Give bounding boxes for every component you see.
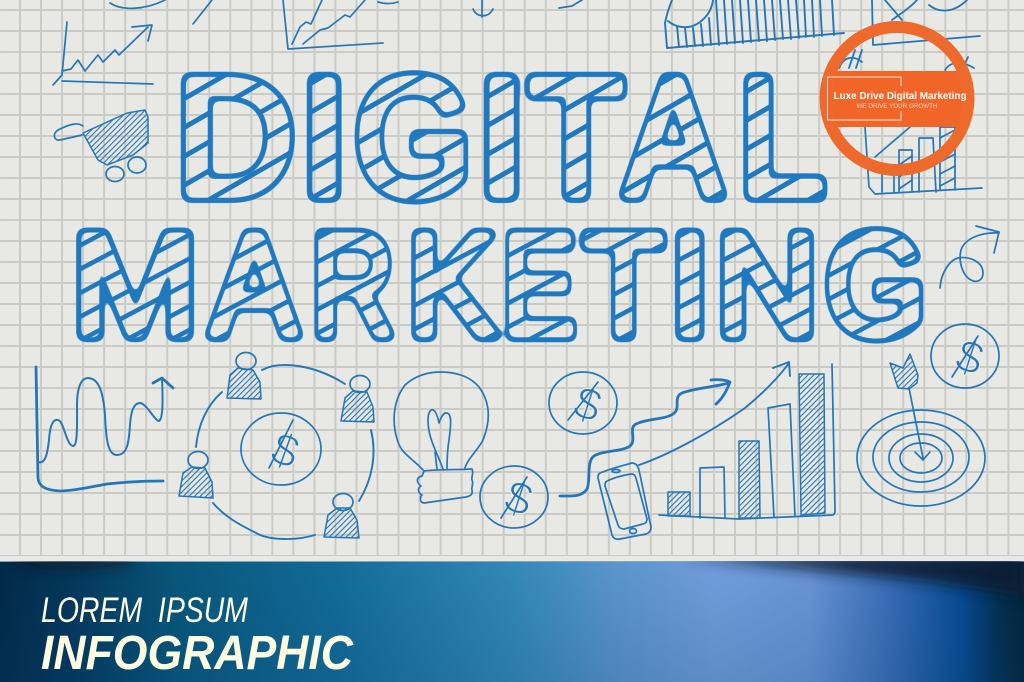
center dollar <box>241 413 321 485</box>
icon: top hatched area chart <box>665 0 844 48</box>
banner shadow left <box>15 553 135 567</box>
bar chart <box>659 364 835 519</box>
arrow: curved rising arrow <box>639 362 790 465</box>
icon: top line chart <box>283 0 383 49</box>
logo name: Luxe Drive Digital Marketing <box>834 91 966 102</box>
logo band <box>832 71 962 127</box>
center dollar: $ <box>265 421 306 479</box>
icon: top right scribble chart <box>839 0 980 70</box>
person 4 <box>324 494 359 538</box>
arrow: squiggle growth arrow <box>560 380 730 496</box>
target rings <box>857 410 985 506</box>
bar 2 <box>700 467 725 518</box>
logo badge <box>820 27 974 170</box>
icon: small line chart top left <box>53 22 153 85</box>
network arcs <box>196 365 374 539</box>
banner subtitle: LOREM IPSUM <box>41 591 249 630</box>
banner title: INFOGRAPHIC <box>41 627 354 680</box>
icon: looping arrow <box>940 226 999 288</box>
icon: light bulb <box>394 372 488 503</box>
icon: dollar coin right: $ <box>950 328 990 385</box>
icon: dollar coin middle <box>549 372 617 434</box>
logo ring <box>826 27 968 170</box>
icon: dollar coin middle: $ <box>568 375 608 432</box>
title: DIGITAL <box>180 70 828 205</box>
icon: bar chart behind logo <box>865 127 982 194</box>
person 1 <box>227 352 261 399</box>
icon: top curve and tick sketches <box>110 0 582 24</box>
icon: dollar coin bottom <box>480 466 548 528</box>
person 2 <box>341 376 374 422</box>
target arrow <box>890 354 930 460</box>
bar 1 <box>668 492 690 516</box>
icon: dollar coin bottom: $ <box>499 469 539 526</box>
bar 3 <box>739 441 760 518</box>
title: MARKETING <box>76 226 924 344</box>
bar 5 <box>799 374 825 515</box>
person 3 <box>179 452 213 498</box>
icon: people network around dollar <box>179 352 374 539</box>
icon: dollar coin right <box>931 324 999 388</box>
icon: shopping cart <box>54 110 148 182</box>
icon: target with arrow <box>857 354 985 506</box>
banner <box>0 553 1024 682</box>
icon: smartphone <box>598 463 651 539</box>
logo inner frame <box>828 77 901 120</box>
logo tagline: WE DRIVE YOUR GROWTH <box>856 103 938 110</box>
icon: wavy line chart <box>36 367 173 491</box>
banner shadow right <box>690 561 1024 598</box>
bar 4 <box>768 404 795 517</box>
